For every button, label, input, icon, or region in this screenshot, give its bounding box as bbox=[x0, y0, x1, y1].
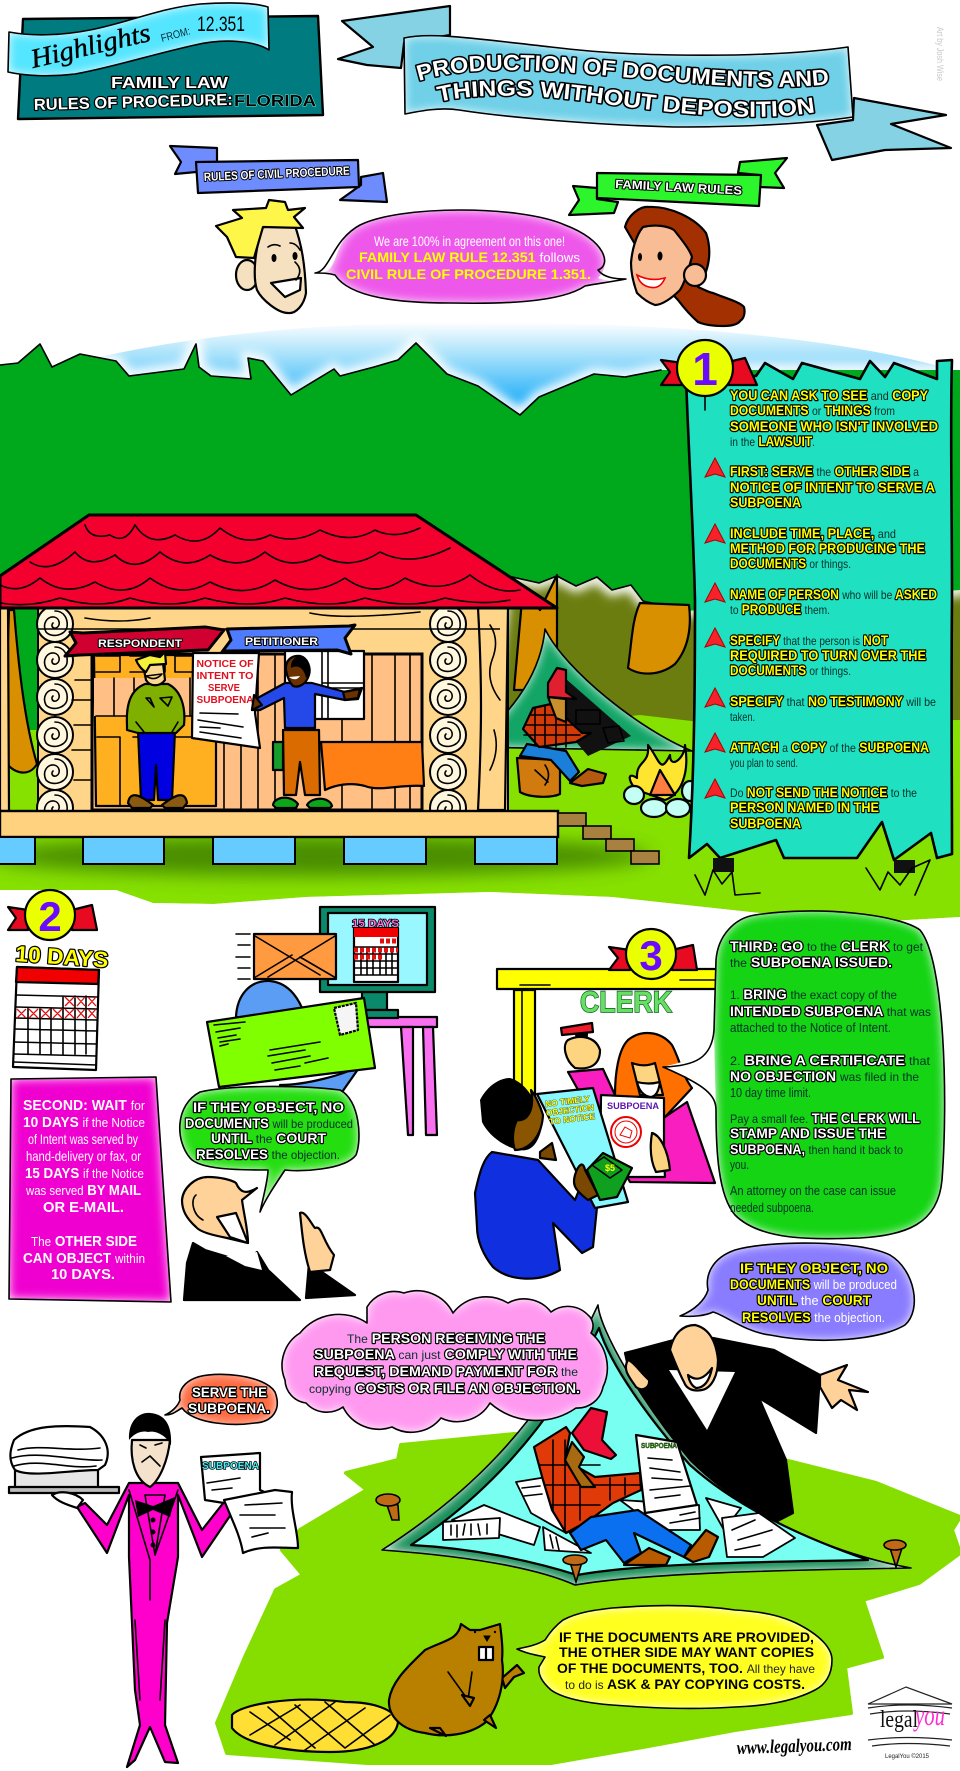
speech bubble: third go to the clerk: An attorney on the case can issue bbox=[730, 1183, 896, 1198]
speech bubble: serve the subpoena: SERVE THE bbox=[192, 1384, 267, 1400]
paper: subpoena: SUBPOENA bbox=[641, 1443, 677, 1450]
speech bubble: if they object (green): UNTIL the COURT bbox=[211, 1130, 326, 1146]
header text: family law rules of procedure: RULES OF PROCEDURE: bbox=[34, 92, 233, 114]
document: subpoena bbox=[600, 1095, 670, 1177]
panel: second wait: hand-delivery or fax, or bbox=[26, 1148, 141, 1164]
website url: www.legalyou.com bbox=[736, 1734, 852, 1759]
speech bubble: if they object (green): IF THEY OBJECT, NO bbox=[193, 1099, 344, 1115]
speech bubble: third go to the clerk: 2. BRING A CERTIFICATE that bbox=[730, 1052, 931, 1068]
list item: specify not required bbox=[705, 628, 926, 678]
list item: first serve: SUBPOENA bbox=[730, 494, 801, 510]
money: $5 bbox=[605, 1163, 615, 1173]
thought cloud: person receiving the subpoena bbox=[282, 1291, 607, 1432]
speech bubble: third go to the clerk bbox=[663, 911, 945, 1239]
speech bubble: third go to the clerk: attached to the Notice of Intent. bbox=[730, 1020, 891, 1035]
ribbon: highlights from 12.351: FROM: bbox=[160, 26, 192, 45]
speech bubble: documents provided: to do is ASK & PAY COPYING COSTS. bbox=[565, 1676, 805, 1692]
calendar: 10 days bbox=[13, 941, 109, 1070]
clerk label: CLERK bbox=[580, 986, 672, 1019]
panel: second wait: 15 DAYS if the Notice bbox=[25, 1165, 144, 1182]
panel: second wait: OR E-MAIL. bbox=[43, 1199, 124, 1216]
list item: first serve: NOTICE OF INTENT TO SERVE A bbox=[730, 479, 935, 495]
panel: second wait: 10 DAYS if the Notice bbox=[23, 1114, 145, 1131]
header text: family law rules of procedure: FAMILY LAW bbox=[111, 75, 229, 92]
list item: attach copy: ATTACH a COPY of the SUBPOENA bbox=[730, 739, 929, 755]
clerk booth bbox=[497, 969, 720, 1110]
list item: name of person: NAME OF PERSON who will be ASKED bbox=[730, 586, 937, 602]
ribbon: highlights from 12.351: Highlights bbox=[27, 17, 153, 74]
badge 2: 2 bbox=[38, 893, 62, 940]
speech bubble: serve the subpoena bbox=[165, 1374, 277, 1424]
orange envelope bbox=[236, 934, 336, 979]
blue figure bbox=[236, 981, 361, 1100]
campfire bbox=[624, 745, 698, 817]
large grass island bbox=[217, 1434, 960, 1763]
poster: notice of intent to serve subpoena: SERVE bbox=[208, 682, 240, 694]
text: intro: SOMEONE WHO ISN'T INVOLVED bbox=[730, 418, 938, 434]
speech bubble: serve the subpoena: SUBPOENA. bbox=[188, 1400, 270, 1416]
roof bbox=[0, 515, 557, 608]
badge 2 bbox=[8, 890, 97, 940]
list item: include time: INCLUDE TIME, PLACE, and bbox=[730, 525, 896, 541]
ribbon: family law rules: FAMILY LAW RULES bbox=[615, 177, 742, 198]
orange curtain bbox=[321, 742, 424, 790]
list item: do not send: SUBPOENA bbox=[730, 815, 801, 831]
log stack right bbox=[430, 606, 466, 826]
list item: specify not required: DOCUMENTS or things. bbox=[730, 662, 851, 678]
panel: highlights header bbox=[8, 3, 323, 119]
list item: do not send bbox=[705, 779, 917, 831]
list item: name of person: to PRODUCE them. bbox=[730, 601, 830, 617]
logo: legalyou: legal bbox=[880, 1707, 918, 1733]
speech bubble: 100% agreement: We are 100% in agreement on this one! bbox=[374, 233, 565, 249]
speech bubble: third go to the clerk: SUBPOENA, then hand it back to bbox=[730, 1141, 903, 1157]
tree left of cabin bbox=[0, 608, 37, 811]
speech bubble: if they object (purple): IF THEY OBJECT, NO bbox=[740, 1260, 888, 1276]
log stack left bbox=[37, 606, 73, 826]
steps bbox=[558, 813, 659, 864]
character: judge in black robe bbox=[625, 1325, 868, 1530]
scenery: sky, forest and grass bbox=[0, 322, 960, 923]
speech bubble: if they object (green): RESOLVES the objection. bbox=[196, 1146, 340, 1162]
judge hand on tent bbox=[626, 1360, 649, 1389]
logo: legalyou bbox=[868, 1687, 952, 1760]
ribbon: highlights from 12.351: 12.351 bbox=[197, 13, 245, 36]
paper: subpoena bbox=[636, 1435, 697, 1513]
subpoena sheets bbox=[201, 1453, 298, 1553]
badge 3 bbox=[609, 929, 697, 979]
list item: attach copy bbox=[705, 733, 929, 770]
character: blond man bbox=[216, 200, 306, 313]
panel: second wait: of Intent was served by bbox=[28, 1131, 138, 1147]
speech bubble: documents provided bbox=[517, 1606, 832, 1708]
character: man with notice and money: NO TIMELY bbox=[544, 1094, 591, 1109]
window bbox=[285, 651, 364, 719]
speech bubble: third go to the clerk: STAMP AND ISSUE THE bbox=[730, 1125, 886, 1141]
list item: no testimony: taken. bbox=[730, 710, 755, 724]
panel: second wait: SECOND: WAIT for bbox=[23, 1097, 146, 1114]
scroll: step 1 bbox=[661, 340, 952, 895]
text: intro bbox=[730, 387, 938, 449]
thought cloud: person receiving the subpoena: REQUEST, DEMAND PAYMENT FOR the bbox=[314, 1363, 578, 1379]
scattered papers bbox=[443, 1477, 795, 1557]
list item: include time bbox=[705, 524, 925, 571]
list item: specify not required: SPECIFY that the person is NOT bbox=[730, 632, 888, 648]
speech bubble: if they object (purple): DOCUMENTS will be produced bbox=[730, 1276, 897, 1292]
monitor: 15 DAYS bbox=[352, 918, 399, 930]
character: butler in pink tuxedo bbox=[9, 1413, 298, 1767]
character: bald man in suit bbox=[182, 1177, 355, 1300]
speech bubble: third go to the clerk: 1. BRING the exact copy of the bbox=[730, 986, 897, 1002]
panel: second wait: The OTHER SIDE bbox=[31, 1233, 137, 1250]
panel: second wait bbox=[9, 1077, 171, 1302]
text: intro: YOU CAN ASK TO SEE and COPY bbox=[730, 387, 929, 403]
speech bubble: documents provided: THE OTHER SIDE MAY WANT COPIES bbox=[559, 1644, 814, 1660]
cabin right post bbox=[478, 608, 508, 810]
panel: second wait: 10 DAYS. bbox=[51, 1266, 115, 1283]
character: respondent bbox=[127, 652, 187, 808]
ribbons: respondent and petitioner: RESPONDENT bbox=[98, 638, 182, 650]
deck pillars bbox=[0, 837, 557, 864]
trees behind cabin bbox=[514, 575, 690, 690]
character: man with notice and money: TO NOTICE bbox=[549, 1111, 596, 1127]
white area over grass corner bbox=[0, 890, 960, 960]
title banner: production of documents: THINGS WITHOUT DEPOSITION bbox=[434, 78, 816, 118]
speech bubble: 100% agreement: FAMILY LAW RULE 12.351 follows bbox=[359, 249, 580, 265]
character: man with notice and money: OBJECTION bbox=[546, 1102, 594, 1118]
door and counter bbox=[94, 655, 216, 806]
header text: family law rules of procedure: FLORIDA bbox=[234, 93, 317, 110]
list item: first serve: FIRST: SERVE the OTHER SIDE a bbox=[730, 463, 919, 479]
speech bubble: 100% agreement bbox=[315, 210, 626, 303]
speech bubble: if they object (purple) bbox=[680, 1243, 914, 1340]
speech bubble: third go to the clerk: THIRD: GO to the CLERK to get bbox=[730, 938, 924, 954]
illustration: computer, envelopes and table bbox=[207, 907, 437, 1135]
speech bubble: third go to the clerk: the SUBPOENA ISSUED. bbox=[730, 954, 892, 970]
speech bubble: third go to the clerk: needed subpoena. bbox=[730, 1200, 814, 1215]
poster: notice of intent to serve subpoena: SUBPOENA bbox=[196, 694, 254, 706]
list item: do not send: Do NOT SEND THE NOTICE to the bbox=[730, 784, 917, 800]
list item: no testimony: SPECIFY that NO TESTIMONY will be bbox=[730, 693, 936, 709]
list item: specify not required: REQUIRED TO TURN OVER THE bbox=[730, 647, 926, 663]
character: clerk with stamp bbox=[561, 1023, 715, 1183]
thought cloud: person receiving the subpoena: SUBPOENA can just COMPLY WITH THE bbox=[314, 1346, 577, 1362]
speech bubble: third go to the clerk: INTENDED SUBPOENA that was bbox=[730, 1003, 931, 1019]
ribbon: family law rules bbox=[569, 158, 787, 215]
speech bubble: if they object (green): DOCUMENTS will be produced bbox=[185, 1115, 353, 1131]
list item: include time: METHOD FOR PRODUCING THE bbox=[730, 540, 925, 556]
ribbons: respondent and petitioner bbox=[65, 625, 355, 656]
header text: family law rules of procedure bbox=[34, 75, 317, 114]
character: man with notice and money bbox=[475, 1078, 632, 1279]
list item: include time: DOCUMENTS or things. bbox=[730, 555, 851, 571]
text: intro: DOCUMENTS or THINGS from bbox=[730, 402, 895, 418]
ribbons: respondent and petitioner: PETITIONER bbox=[245, 636, 318, 648]
speech bubble: if they object (purple): UNTIL the COURT bbox=[757, 1292, 871, 1308]
speech bubble: third go to the clerk: you. bbox=[730, 1157, 749, 1172]
list item: no testimony bbox=[705, 688, 936, 724]
list item: attach copy: you plan to send. bbox=[730, 756, 798, 770]
subpoena sheets: SUBPOENA bbox=[202, 1461, 259, 1472]
stack of papers on tray bbox=[9, 1426, 119, 1493]
tent pegs bbox=[376, 1494, 906, 1582]
shirt and bow tie bbox=[129, 1490, 178, 1700]
thought cloud: person receiving the subpoena: The PERSON RECEIVING THE bbox=[347, 1330, 545, 1346]
thought cloud: person receiving the subpoena: copying COSTS OR FILE AN OBJECTION. bbox=[309, 1380, 580, 1396]
camper with subpoena bbox=[534, 1408, 718, 1565]
ribbon: rules of civil procedure: RULES OF CIVIL PROCEDURE bbox=[204, 164, 350, 184]
character: petitioner bbox=[252, 656, 362, 808]
speech bubble: if they object (purple): RESOLVES the objection. bbox=[742, 1309, 885, 1325]
logo: legalyou: LegalYou ©2015 bbox=[885, 1753, 930, 1760]
poster: notice of intent to serve subpoena bbox=[192, 653, 260, 748]
speech bubble: 100% agreement: CIVIL RULE OF PROCEDURE 1.351. bbox=[346, 266, 591, 282]
speech bubble: documents provided: OF THE DOCUMENTS, TOO. All they have bbox=[557, 1660, 815, 1676]
money bbox=[587, 1153, 632, 1200]
document: subpoena: SUBPOENA bbox=[607, 1101, 659, 1112]
monitor bbox=[320, 907, 435, 1018]
camper sitting on stump bbox=[517, 668, 606, 797]
speech bubble: third go to the clerk: NO OBJECTION was filed in the bbox=[730, 1068, 919, 1084]
badge 1: 1 bbox=[692, 343, 718, 395]
list item: first serve bbox=[705, 458, 935, 510]
tent with camper reading bbox=[468, 629, 692, 797]
speech bubble: documents provided: IF THE DOCUMENTS ARE PROVIDED, bbox=[559, 1629, 814, 1645]
ribbon: highlights from 12.351 bbox=[8, 3, 269, 76]
list item: name of person bbox=[705, 583, 937, 617]
text: intro: in the LAWSUIT. bbox=[730, 433, 815, 449]
log cabin bbox=[0, 515, 659, 864]
badge 3: 3 bbox=[639, 932, 663, 979]
table bbox=[367, 1017, 437, 1135]
title banner: production of documents: PRODUCTION OF DOCUMENTS AND bbox=[414, 53, 830, 89]
poster: notice of intent to serve subpoena: INTENT TO bbox=[196, 670, 254, 682]
green chair bbox=[273, 742, 283, 770]
deck bbox=[0, 811, 558, 837]
title banner: production of documents bbox=[336, 4, 952, 162]
credit: art by Josh Wise: Art by Josh Wise bbox=[935, 27, 945, 81]
panel: second wait: was served BY MAIL bbox=[25, 1182, 141, 1199]
tent with camper and papers bbox=[376, 1305, 911, 1585]
character: beaver bbox=[232, 1624, 524, 1752]
speech bubble: if they object (green) bbox=[180, 1086, 359, 1212]
badge 1 bbox=[661, 340, 757, 410]
panel: second wait: CAN OBJECT within bbox=[23, 1250, 145, 1267]
ribbon: rules of civil procedure bbox=[170, 146, 387, 202]
posts and grass under scroll bbox=[695, 858, 930, 895]
logo: legalyou: you bbox=[913, 1699, 945, 1732]
head bbox=[129, 1413, 171, 1487]
speech bubble: third go to the clerk: Pay a small fee. THE CLERK WILL bbox=[730, 1110, 920, 1126]
character: woman with red hair bbox=[625, 207, 745, 326]
green envelope bbox=[207, 998, 375, 1087]
speech bubble: third go to the clerk: 10 day time limit. bbox=[730, 1085, 811, 1100]
list item: do not send: PERSON NAMED IN THE bbox=[730, 799, 879, 815]
poster: notice of intent to serve subpoena: NOTICE OF bbox=[196, 658, 254, 670]
calendar: 10 days: 10 DAYS bbox=[15, 941, 109, 972]
